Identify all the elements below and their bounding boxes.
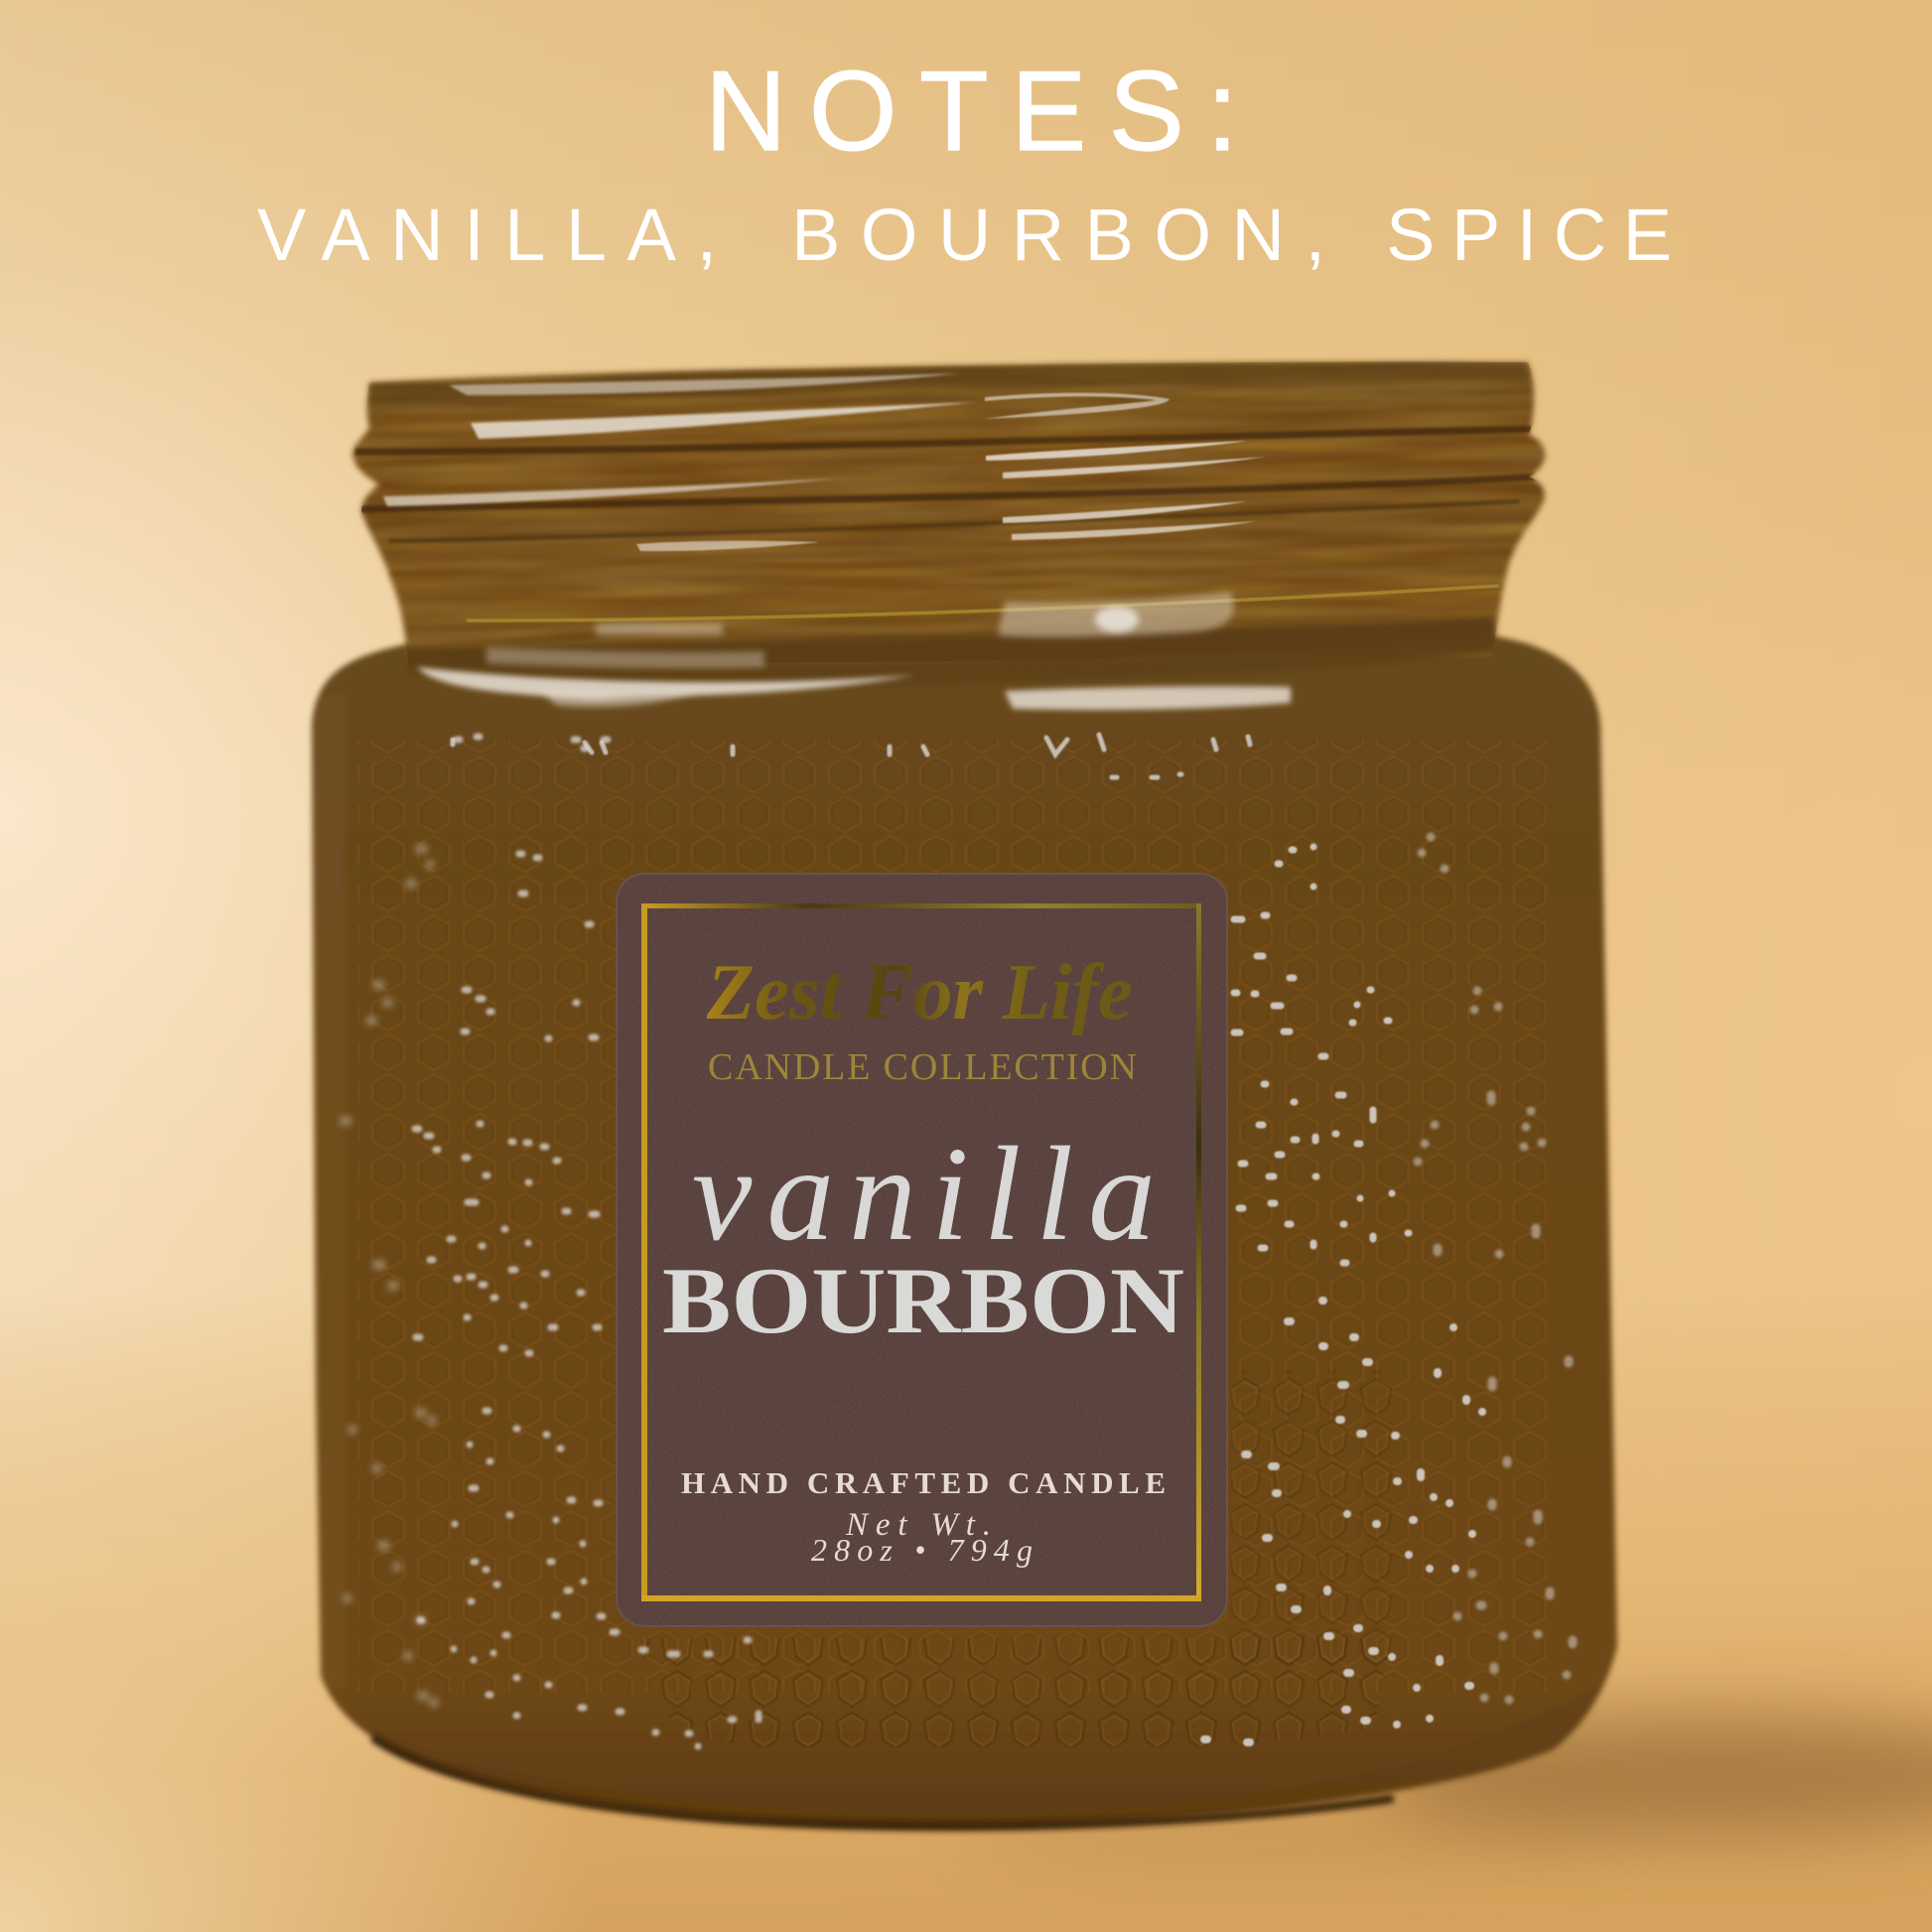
jar: [298, 325, 1628, 1847]
collection line: CANDLE COLLECTION: [708, 1046, 1137, 1088]
net weight line: Net Wt.: [845, 1507, 991, 1543]
scent name: bourbon: BOURBON: [662, 1248, 1184, 1353]
weight values: 28oz • 794g: [811, 1532, 1033, 1568]
specular highlights on glass: [383, 373, 1291, 710]
subtitle: scent notes: VANILLA,: [257, 194, 717, 276]
brand name: Zest For Life: [706, 949, 1133, 1036]
subtitle: scent notes: [257, 194, 1672, 276]
title: NOTES:: [705, 49, 1238, 175]
hand crafted line: HAND CRAFTED CANDLE: [681, 1465, 1166, 1500]
scent name: vanilla: vanilla: [692, 1120, 1156, 1269]
product label: [617, 874, 1227, 1626]
jar shadow on floor: [963, 1714, 1932, 1850]
jar neck with threads: [348, 357, 1549, 657]
bottom contact shadow: [375, 1739, 1390, 1827]
subtitle: scent notes: BOURBON,: [791, 194, 1325, 276]
neck front rim over shoulder: [409, 640, 1492, 675]
embossed glints on jar body: [345, 735, 1573, 1746]
neck thread ridges: [355, 369, 1541, 663]
gold foil border: [641, 903, 1201, 1601]
jar body with lace texture: [298, 625, 1628, 1847]
subtitle: scent notes: SPICE: [1386, 194, 1672, 276]
